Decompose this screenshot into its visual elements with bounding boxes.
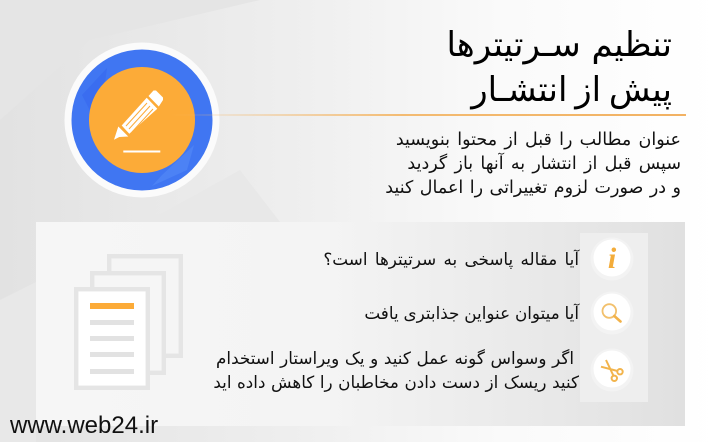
question 3 (213, 348, 579, 392)
question 3: کنید ریسک از دست دادن مخاطبان را کاهش داده اید (213, 372, 579, 392)
panel: checklist (36, 222, 685, 426)
intro text (385, 130, 681, 198)
icon: scissors (594, 350, 630, 388)
divider (170, 114, 686, 116)
title: تنظیم سـرتیترها (446, 25, 672, 65)
website address: www.web24.ir (10, 412, 158, 439)
intro text: سپس قبل از انتشار به آنها باز گردید (407, 154, 681, 174)
intro text: عنوان مطالب را قبل از محتوا بنویسید (396, 130, 681, 150)
icon: info (594, 240, 630, 276)
question 1: آیا مقاله پاسخی به سرتیترها است؟ (323, 249, 579, 269)
icon: info: i (608, 242, 617, 275)
icon: documents (74, 254, 183, 390)
intro text: و در صورت لزوم تغییراتی را اعمال کنید (385, 178, 681, 198)
icon: magnifier (594, 294, 630, 330)
title: پیش از انتشـار (471, 70, 672, 110)
question 3: اگر وسواس گونه عمل کنید و یک ویراستار استخدام (216, 348, 574, 368)
title (446, 25, 672, 110)
icon column (580, 233, 648, 402)
icon: pencil badge (64, 42, 220, 198)
question 2: آیا میتوان عنواین جذابتری یافت (364, 303, 579, 323)
